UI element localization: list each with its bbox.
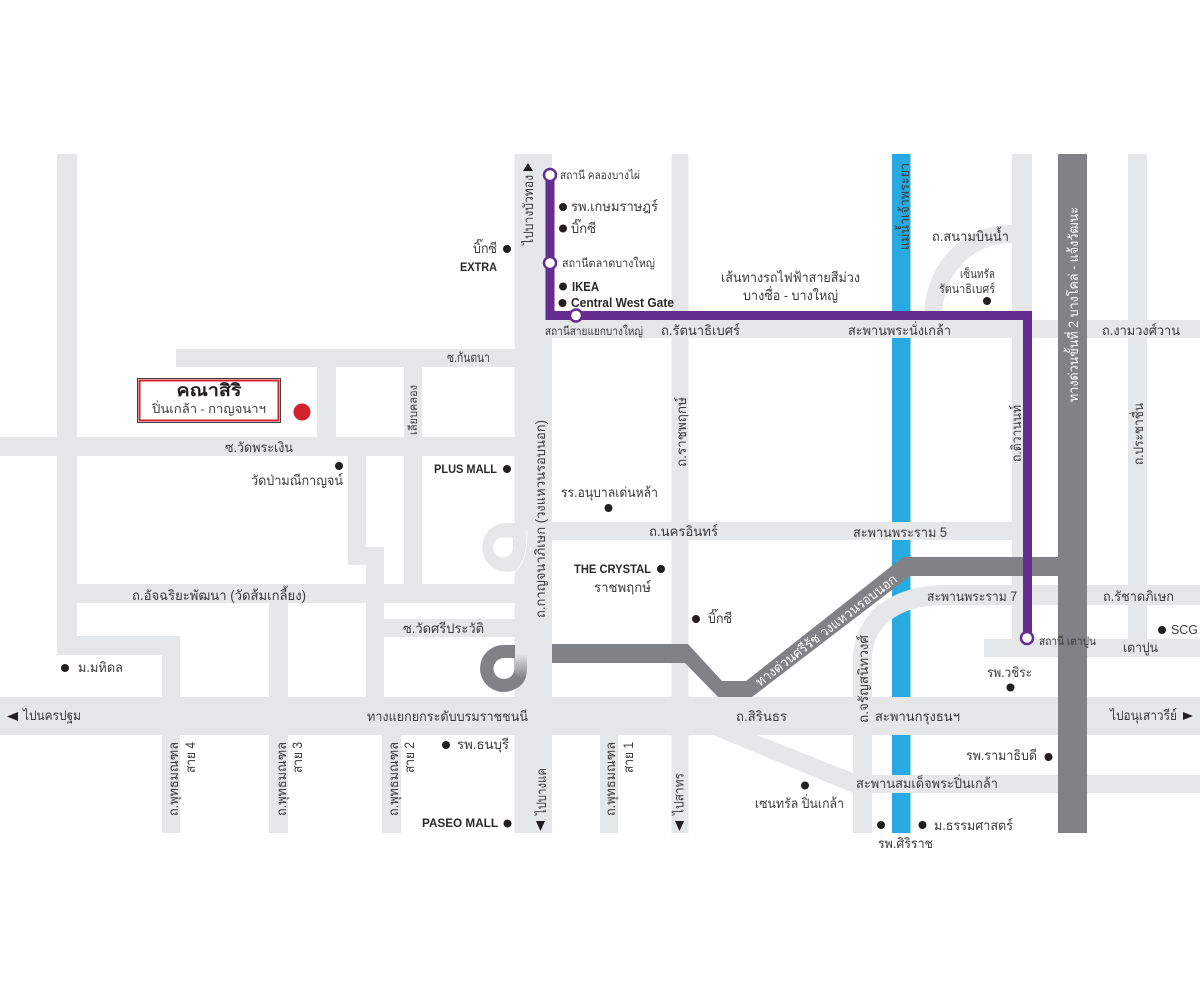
river: Chao Phraya (892, 154, 910, 833)
vertical road labels (166, 163, 1146, 816)
landmark: Big C Extra (460, 238, 511, 274)
station: Khlong Bang Phai (544, 169, 640, 182)
project logo box: คณาสิริ (176, 381, 242, 400)
station: Yaek Bang Yai: สถานีสายแยกบางใหญ่ (545, 325, 643, 338)
landmark: Siriraj Hospital: รพ.ศิริราช (878, 836, 933, 851)
horizontal road labels (132, 226, 1180, 791)
horizontal road labels: ซ.กันตนา (447, 350, 490, 365)
vertical road labels: ถ.ราชพฤกษ์ (673, 397, 689, 467)
vertical road labels: ถ.จรัญสนิทวงศ์ (855, 635, 871, 723)
landmark: Plus Mall: PLUS MALL (434, 462, 497, 476)
horizontal road labels: ซ.วัดพระเงิน (225, 440, 293, 455)
purple line route (550, 175, 1028, 638)
station: Khlong Bang Phai: สถานี คลองบางไผ่ (560, 169, 640, 182)
landmark: Big C Extra: EXTRA (460, 260, 497, 274)
project location marker (294, 404, 310, 420)
vertical road labels: ถ.พุทธมณฑล (166, 742, 182, 816)
vertical road labels: ถ.พุทธมณฑล (603, 742, 619, 816)
landmark: SCG (1158, 623, 1198, 637)
landmark: IKEA: IKEA (572, 280, 599, 294)
purple line label (721, 270, 860, 303)
horizontal road labels: ถ.รัตนาธิเบศร์ (661, 322, 740, 338)
upper interchange loop (482, 523, 527, 572)
station: Tao Poon (1021, 632, 1096, 648)
landmark: Siriraj Hospital (877, 821, 933, 851)
landmark: Big C Ratchapruek (692, 608, 732, 626)
landmark: Vajira Hospital (987, 665, 1032, 692)
landmark: Central Pinklao (755, 782, 844, 811)
landmark: Big C Ratchapruek: บิ๊กซี (708, 608, 732, 626)
horizontal road labels: ถ.รัชาดภิเษก (1103, 589, 1174, 604)
horizontal road labels: ซ.วัดศรีประวัติ (403, 621, 484, 636)
landmark: Central Rattanathibet: เซ็นทรัล (960, 266, 995, 281)
landmark: Mahidol University (61, 660, 123, 675)
direction: Nakhon Pathom (7, 708, 81, 724)
horizontal road labels: ถ.นครอินทร์ (649, 523, 718, 539)
landmark: The Crystal Ratchapruek: ราชพฤกษ์ (594, 579, 651, 595)
landmark: The Crystal Ratchapruek (574, 562, 665, 595)
landmark: Anuban Denla School (561, 485, 658, 512)
landmark: Central Pinklao: เซนทรัล ปิ่นเกล้า (755, 794, 844, 811)
vertical road labels: แม่น้ำเจ้าพระยา (894, 163, 912, 250)
direction: Sathorn (672, 773, 686, 831)
horizontal road labels: ถ.สนามบินน้ำ (932, 226, 1009, 244)
landmark: Big C Extra: บิ๊กซี (473, 238, 497, 256)
expressway: Sirat outer ring (552, 557, 1058, 697)
landmark: Wat Pa Mani Kanchan: วัดป่ามณีกาญจน์ (251, 472, 343, 488)
landmark: SCG: SCG (1171, 623, 1198, 637)
station: Tao Poon: สถานี เตาปูน (1039, 635, 1096, 648)
horizontal road labels: เตาปูน (1123, 640, 1158, 656)
lower interchange loop (480, 645, 527, 692)
expressway labels: ทางด่วนขั้นที่ 2 บางโคล่ - แจ้งวัฒนะ (1063, 207, 1081, 402)
landmark: Vajira Hospital: รพ.วชิระ (987, 665, 1032, 680)
landmark: Central Rattanathibet: รัตนาธิเบศร์ (939, 282, 995, 296)
vertical road labels: ถ.ประชาชื่น (1129, 403, 1146, 465)
horizontal road labels: สะพานพระราม 7 (927, 589, 1017, 604)
vertical road labels: ถ.พุทธมณฑล (274, 742, 290, 816)
horizontal road labels: สะพานสมเด็จพระปิ่นเกล้า (856, 774, 998, 791)
landmark: Central West Gate: Central West Gate (571, 296, 674, 310)
direction: Bang Bua Thong: ไปบางบัวทอง (521, 175, 536, 246)
vertical road labels: ถ.ติวานนท์ (1008, 405, 1024, 462)
horizontal road labels: ถ.อัจฉริยะพัฒนา (วัดส้มเกลี้ยง) (132, 585, 306, 603)
horizontal road labels: สะพานพระราม 5 (853, 525, 947, 540)
landmark: Central Rattanathibet (939, 266, 995, 305)
direction: Victory Monument: ไปอนุเสาวรีย์ (1109, 707, 1177, 724)
vertical road labels: สาย 4 (183, 742, 198, 773)
landmark: Thammasat University: ม.ธรรมศาสตร์ (934, 817, 1013, 833)
direction: Nakhon Pathom: ไปนครปฐม (22, 708, 81, 724)
landmark: Ramathibodi Hospital: รพ.รามาธิบดี (966, 748, 1037, 763)
landmark: Thonburi Hospital: รพ.ธนบุรี (457, 737, 509, 753)
vertical road labels: สาย 2 (402, 742, 417, 773)
landmark: Paseo Mall: PASEO MALL (422, 816, 498, 830)
horizontal road labels: สะพานพระนั่งเกล้า (848, 321, 951, 338)
expressway labels (753, 207, 1081, 689)
purple line label: บางซื่อ - บางใหญ่ (743, 286, 838, 303)
landmark: Big C Bang Yai: บิ๊กซี (571, 218, 596, 236)
direction: Bang Khae: ไปบางแค (534, 768, 549, 816)
horizontal road labels: สะพานกรุงธนฯ (875, 709, 960, 725)
landmark: Kasemrad Hospital: รพ.เกษมราษฎร์ (571, 198, 658, 214)
station: Yaek Bang Yai (545, 310, 643, 338)
project logo box (138, 378, 280, 422)
expressway: stage 2 tollway (1058, 154, 1087, 833)
expressway labels: ทางด่วนศรีรัช วงแหวนรอบนอก (753, 572, 900, 689)
vertical road labels: ถ.กาญจนาภิเษก (วงแหวนรอบนอก) (533, 420, 548, 618)
landmark: Big C Bang Yai (559, 218, 596, 236)
purple line label: เส้นทางรถไฟฟ้าสายสีม่วง (721, 270, 860, 285)
direction: Sathorn: ไปสาทร (672, 773, 686, 816)
landmark: Wat Pa Mani Kanchan (251, 462, 343, 488)
vertical road labels: ถ.พุทธมณฑล (386, 742, 402, 816)
direction: Bang Khae (534, 768, 549, 831)
horizontal road labels: ถ.สิรินธร (736, 709, 787, 724)
landmark: Anuban Denla School: รร.อนุบาลเด่นหล้า (561, 485, 658, 501)
road network (0, 154, 1200, 833)
project logo box: ปิ่นเกล้า - กาญจนาฯ (151, 400, 266, 416)
horizontal road labels: ทางแยกยกระดับบรมราชชนนี (367, 709, 528, 724)
station: Talad Bang Yai: สถานีตลาดบางใหญ่ (562, 257, 655, 270)
vertical road labels: สาย 3 (290, 742, 305, 773)
landmark: IKEA (559, 280, 599, 294)
horizontal road labels: ถ.งามวงศ์วาน (1102, 322, 1180, 338)
vertical road labels: สาย 1 (621, 742, 636, 773)
vertical road labels: เลียบคลอง (407, 385, 420, 435)
landmark: The Crystal Ratchapruek: THE CRYSTAL (574, 562, 651, 576)
landmark: Mahidol University: ม.มหิดล (78, 660, 123, 675)
